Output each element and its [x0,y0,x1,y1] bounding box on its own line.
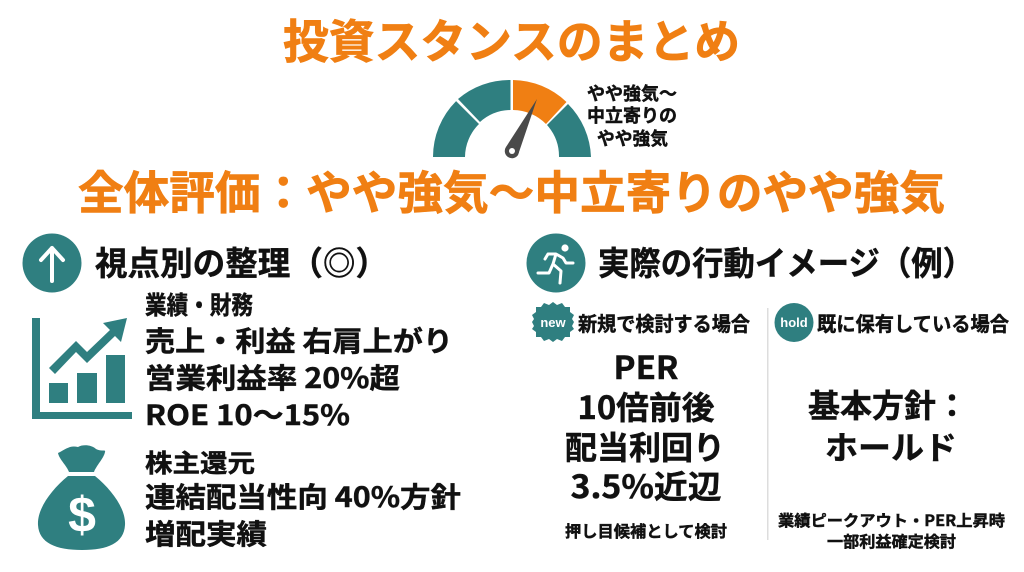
icon: money bag: $ [68,487,96,543]
icon: hold badge [774,303,814,342]
icon: up arrow [22,234,82,292]
text block: earnings and finance [145,286,453,434]
text block: shareholder returns: 株主還元 [145,444,255,480]
note: buy on dips: 押し目候補として検討 [565,518,727,542]
note: profit taking: 一部利益確定検討 [827,530,957,552]
icon: growth chart [32,318,132,419]
note: profit taking: 業績ピークアウト・PER上昇時 [778,509,1006,531]
gauge [433,80,591,158]
text block: new investment criteria: 配当利回り [565,423,725,469]
gauge label [587,80,677,151]
text block: earnings and finance: 売上・利益 右肩上がり [145,320,453,360]
text block: shareholder returns: 増配実績 [145,513,267,553]
heading: viewpoints: 視点別の整理（◎） [95,237,388,285]
icon: runner [526,234,586,292]
text block: earnings and finance: 営業利益率 20%超 [145,357,400,397]
text block: new investment criteria: PER [614,343,679,389]
gauge label: やや強気〜 [587,80,677,106]
gauge label: 中立寄りの [587,102,677,128]
icon: new badge: new [540,315,567,330]
text block: hold policy: ホールド [825,423,957,469]
text block: new investment criteria: 3.5%近辺 [570,462,722,508]
icon: new badge [532,302,574,342]
heading: action image: 実際の行動イメージ（例） [598,237,974,285]
column divider [767,308,768,540]
text block: shareholder returns: 連結配当性向 40%方針 [145,476,461,516]
column heading: hold: 既に保有している場合 [817,308,1009,337]
text block: shareholder returns [145,444,461,553]
column heading: new: 新規で検討する場合 [578,308,750,337]
icon: hold badge: hold [780,315,808,330]
icon: money bag [38,445,125,550]
note: profit taking [778,509,1006,552]
gauge label: やや強気 [597,125,668,151]
text block: hold policy: 基本方針： [808,381,968,427]
text block: new investment criteria: 10倍前後 [578,383,714,429]
text block: earnings and finance: ROE 10〜15% [145,394,350,434]
text block: earnings and finance: 業績・財務 [145,286,253,322]
title: 投資スタンスのまとめ [283,6,740,72]
overall rating heading: 全体評価：やや強気〜中立寄りのやや強気 [78,157,945,223]
text block: new investment criteria [565,343,725,508]
text block: hold policy [808,381,968,469]
